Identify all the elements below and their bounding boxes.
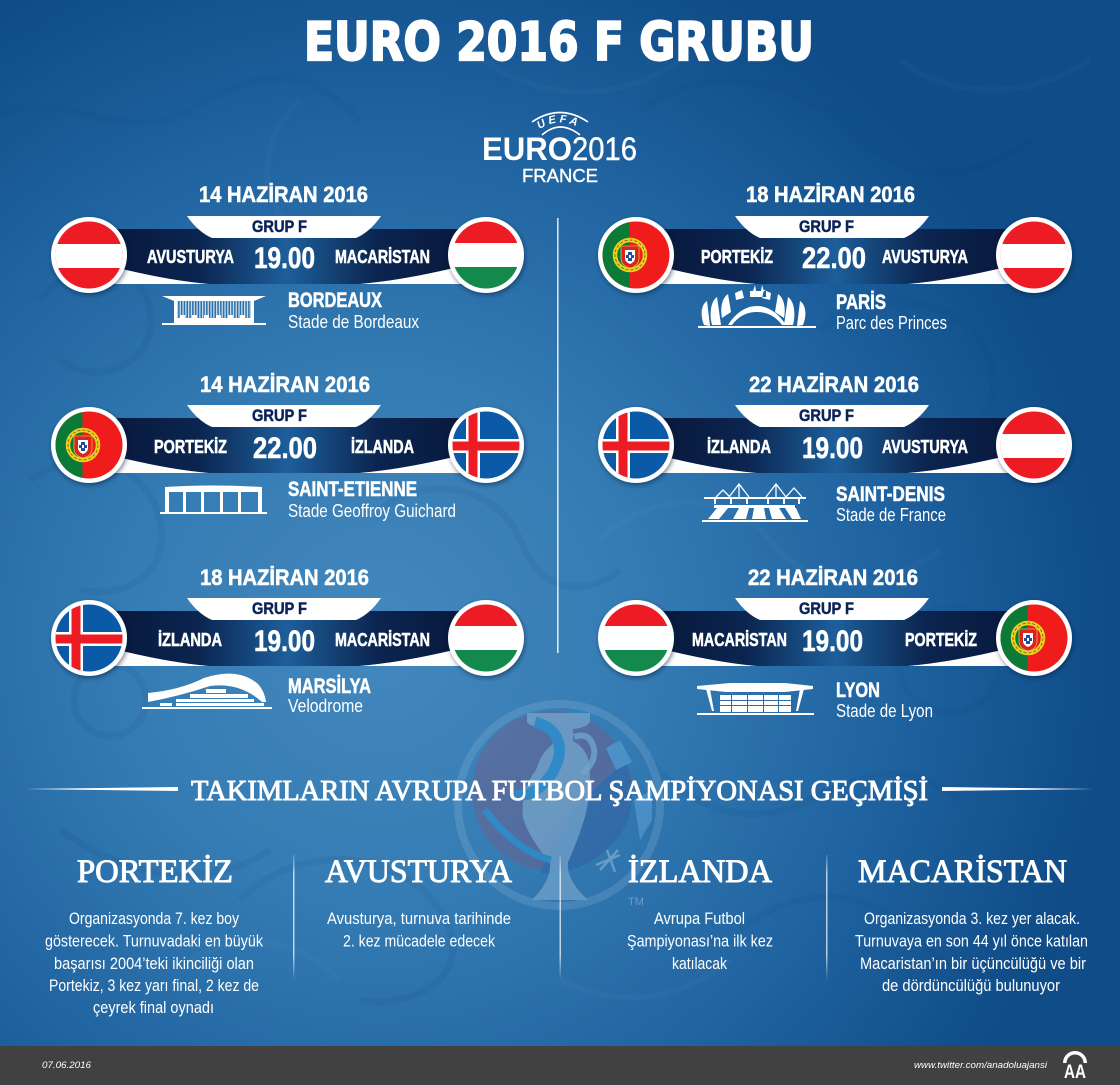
match: Portekiz - Avusturya: GRUP F bbox=[799, 217, 854, 236]
match: İzlanda - Macaristan bbox=[49, 565, 526, 716]
match: Avusturya - Macaristan: 19.00 bbox=[254, 242, 315, 275]
panel: Macaristan: Organizasyonda 3. kez yer alacak. bbox=[864, 909, 1080, 928]
match: Avusturya - Macaristan: MACARİSTAN bbox=[335, 246, 430, 267]
panel: Portekiz: başarısı 2004’teki ikinciliği olan bbox=[54, 954, 254, 973]
panel: İzlanda bbox=[627, 854, 773, 973]
match: Portekiz - Avusturya: PORTEKİZ bbox=[701, 246, 773, 267]
match: Avusturya - Macaristan: Stade de Bordeaux bbox=[288, 311, 420, 332]
match: Portekiz - İzlanda: 14 HAZİRAN 2016 bbox=[200, 372, 370, 397]
background trophy emblem watermark: TM bbox=[628, 896, 644, 908]
panel: İzlanda: Avrupa Futbol bbox=[654, 909, 745, 928]
background trophy emblem watermark bbox=[458, 704, 660, 908]
match: İzlanda - Macaristan: 19.00 bbox=[254, 625, 315, 658]
panel: İzlanda: İZLANDA bbox=[628, 854, 772, 890]
match: Portekiz - İzlanda: 22.00 bbox=[253, 432, 317, 465]
panel: Portekiz: PORTEKİZ bbox=[77, 854, 233, 890]
title: EURO 2016 F GRUBU bbox=[304, 12, 814, 73]
match: Avusturya - Macaristan: AVUSTURYA bbox=[147, 246, 234, 267]
match: Portekiz - İzlanda: Stade Geoffroy Guichard bbox=[288, 500, 456, 521]
dashed title rule bbox=[60, 80, 1060, 82]
match: Portekiz - Avusturya: PARİS bbox=[836, 291, 886, 314]
divider bbox=[826, 855, 828, 980]
panel: Macaristan: MACARİSTAN bbox=[858, 854, 1067, 890]
match: Macaristan - Portekiz: MACARİSTAN bbox=[692, 629, 787, 650]
panel: İzlanda: Şampiyonası’na ilk kez bbox=[627, 932, 773, 950]
match: Macaristan - Portekiz: GRUP F bbox=[799, 599, 854, 618]
match: Avusturya - Macaristan: BORDEAUX bbox=[288, 289, 382, 312]
footer link: www.twitter.com/anadoluajansi bbox=[914, 1060, 1048, 1071]
match: İzlanda - Macaristan: Velodrome bbox=[288, 695, 363, 716]
match: Portekiz - İzlanda: İZLANDA bbox=[351, 436, 414, 457]
match: Macaristan - Portekiz: Stade de Lyon bbox=[836, 700, 933, 721]
panel: Portekiz: gösterecek. Turnuvadaki en büyük bbox=[45, 932, 263, 950]
UEFA EURO 2016 France logo: U E F A bbox=[537, 115, 577, 128]
match: Portekiz - Avusturya: 18 HAZİRAN 2016 bbox=[746, 182, 915, 207]
match: Portekiz - Avusturya: 22.00 bbox=[802, 242, 866, 275]
match: Macaristan - Portekiz: PORTEKİZ bbox=[905, 629, 977, 650]
match: İzlanda - Avusturya: İZLANDA bbox=[707, 436, 771, 457]
UEFA EURO 2016 France logo: FRANCE bbox=[522, 166, 598, 186]
match: İzlanda - Avusturya: Stade de France bbox=[836, 504, 946, 525]
panel: Macaristan bbox=[855, 854, 1088, 995]
divider bbox=[560, 855, 561, 980]
panel: Avusturya: 2. kez mücadele edecek bbox=[343, 932, 495, 950]
panel: Avusturya bbox=[325, 854, 512, 950]
panel: İzlanda: katılacak bbox=[672, 954, 727, 973]
match: Avusturya - Macaristan: GRUP F bbox=[252, 217, 307, 236]
UEFA EURO 2016 France logo: EURO bbox=[482, 131, 572, 167]
match: Portekiz - Avusturya bbox=[596, 182, 1074, 333]
centre divider between columns bbox=[557, 218, 559, 653]
match: İzlanda - Macaristan: 18 HAZİRAN 2016 bbox=[200, 565, 369, 590]
icon: Anadolu Agency logo: AA bbox=[1064, 1062, 1086, 1083]
footer bar bbox=[0, 1046, 1120, 1085]
match: İzlanda - Macaristan: MACARİSTAN bbox=[335, 629, 430, 650]
match: Macaristan - Portekiz: 19.00 bbox=[802, 625, 863, 658]
match: Avusturya - Macaristan bbox=[49, 182, 526, 332]
panel: Portekiz: çeyrek final oynadı bbox=[93, 998, 214, 1017]
match: İzlanda - Avusturya: AVUSTURYA bbox=[882, 436, 968, 457]
match: İzlanda - Avusturya: SAINT-DENIS bbox=[836, 483, 945, 506]
panel: Macaristan: de dördüncülüğü bulunuyor bbox=[882, 976, 1060, 995]
panel: Macaristan: Macaristan’ın bir üçüncülüğü ve bir bbox=[860, 954, 1086, 973]
section heading: history: TAKIMLARIN AVRUPA FUTBOL ŞAMPİYONASI GEÇMİŞİ bbox=[191, 775, 928, 807]
divider bbox=[293, 855, 294, 980]
match: İzlanda - Avusturya: 19.00 bbox=[802, 432, 863, 465]
footer date: 07.06.2016 bbox=[42, 1060, 92, 1071]
match: Portekiz - İzlanda bbox=[49, 372, 526, 521]
panel: Avusturya: AVUSTURYA bbox=[325, 854, 512, 890]
icon: Anadolu Agency logo bbox=[1063, 1051, 1087, 1083]
match: Macaristan - Portekiz bbox=[596, 565, 1074, 721]
match: Portekiz - İzlanda: PORTEKİZ bbox=[154, 436, 227, 457]
match: Portekiz - Avusturya: AVUSTURYA bbox=[882, 246, 968, 267]
UEFA EURO 2016 France logo: 2016 bbox=[572, 131, 637, 167]
UEFA EURO 2016 France logo bbox=[482, 112, 637, 186]
match: Macaristan - Portekiz: LYON bbox=[836, 679, 880, 702]
match: İzlanda - Macaristan: MARSİLYA bbox=[288, 675, 371, 698]
panel: Portekiz bbox=[45, 854, 263, 1017]
match: Avusturya - Macaristan: 14 HAZİRAN 2016 bbox=[199, 182, 368, 207]
match: İzlanda - Macaristan: İZLANDA bbox=[158, 629, 222, 650]
match: Portekiz - İzlanda: GRUP F bbox=[252, 406, 307, 425]
panel: Portekiz: Portekiz, 3 kez yarı final, 2 kez de bbox=[49, 976, 259, 995]
match: Portekiz - İzlanda: SAINT-ETIENNE bbox=[288, 478, 417, 501]
match: Portekiz - Avusturya: Parc des Princes bbox=[836, 312, 947, 333]
match: İzlanda - Avusturya: GRUP F bbox=[799, 406, 854, 425]
panel: Avusturya: Avusturya, turnuva tarihinde bbox=[327, 909, 511, 928]
match: İzlanda - Avusturya bbox=[596, 372, 1074, 525]
match: İzlanda - Macaristan: GRUP F bbox=[252, 599, 307, 618]
match: Macaristan - Portekiz: 22 HAZİRAN 2016 bbox=[748, 565, 918, 590]
match: İzlanda - Avusturya: 22 HAZİRAN 2016 bbox=[749, 372, 919, 397]
panel: Portekiz: Organizasyonda 7. kez boy bbox=[69, 909, 239, 928]
